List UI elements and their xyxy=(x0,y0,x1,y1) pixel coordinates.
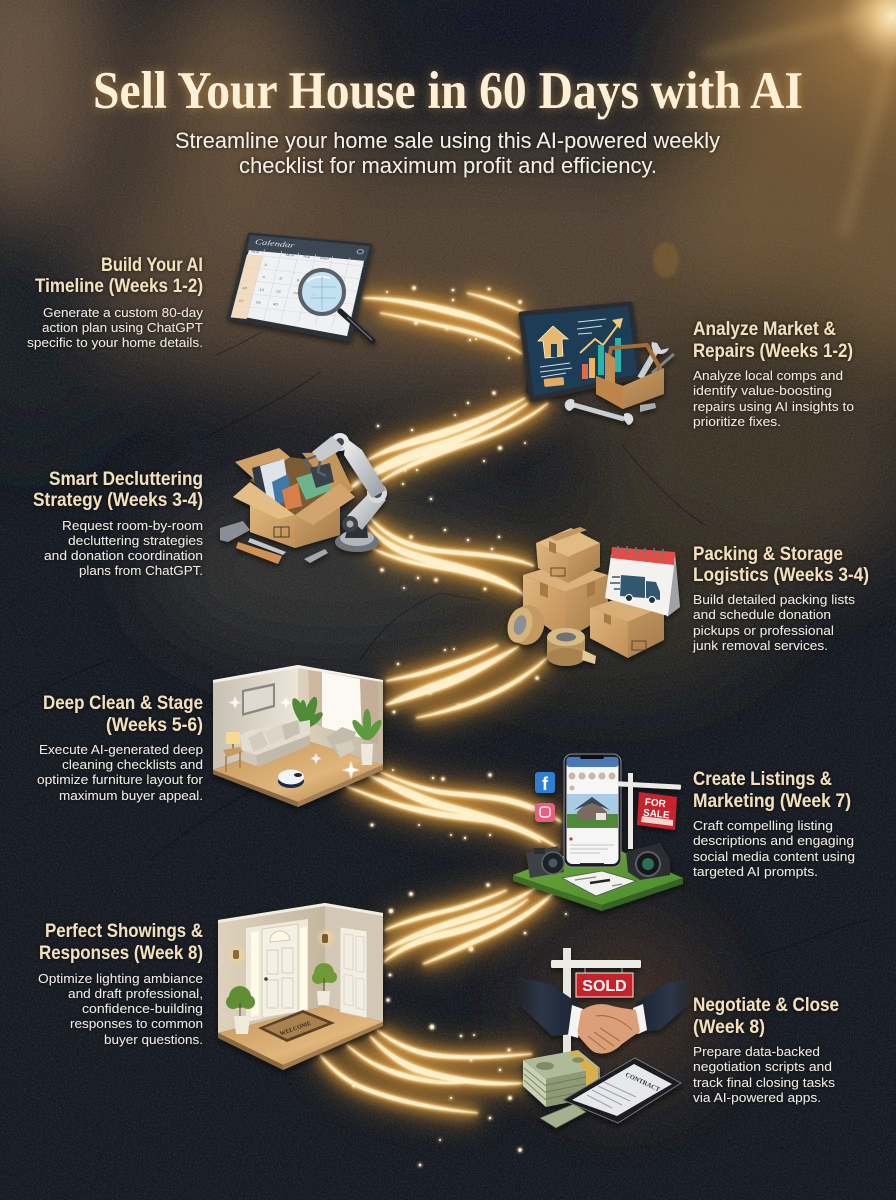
description: buyer questions. xyxy=(104,1032,203,1047)
icon: calendar tablet with magnifier: 17 xyxy=(238,299,244,303)
heading: Deep Clean & Stage xyxy=(43,692,203,714)
heading xyxy=(693,768,851,812)
title: Sell Your House in 60 Days with AI xyxy=(93,62,803,120)
icon: sold sign, handshake, cash and contract: CONTRACT xyxy=(624,1071,661,1094)
heading: Perfect Showings & xyxy=(45,920,203,942)
description: and donation coordination xyxy=(44,548,203,563)
panel: Perfect Showings & Responses xyxy=(38,903,383,1070)
description: prioritize fixes. xyxy=(693,414,781,429)
panel: Build Your AI Timeline xyxy=(27,235,373,350)
description: plans from ChatGPT. xyxy=(79,563,203,578)
description xyxy=(693,368,854,429)
description: Optimize lighting ambiance xyxy=(38,971,203,986)
heading xyxy=(693,543,869,586)
panel: Smart Decluttering Strategy xyxy=(33,433,387,578)
description: Generate a custom 80-day xyxy=(43,305,204,320)
description: action plan using ChatGPT xyxy=(42,320,203,335)
icon: cardboard box with robot arm xyxy=(220,433,387,564)
subtitle: checklist for maximum profit and efficiency. xyxy=(239,153,657,178)
description xyxy=(27,305,204,350)
panel: Analyze Market & Repairs xyxy=(521,304,854,429)
heading xyxy=(33,468,203,511)
icon: calendar tablet with magnifier: 28 xyxy=(311,293,317,297)
icon: calendar tablet with magnifier: 29 xyxy=(255,301,261,305)
heading: Marketing (Week 7) xyxy=(693,790,851,812)
icon: moving boxes, tape and truck calendar xyxy=(504,527,680,666)
description: maximum buyer appeal. xyxy=(59,788,203,803)
icon: calendar tablet with magnifier: Sun xyxy=(251,250,260,254)
description: Request room-by-room xyxy=(62,518,203,533)
description xyxy=(37,742,204,803)
description: targeted AI prompts. xyxy=(693,864,818,879)
icon: calendar tablet with magnifier: 9 xyxy=(296,279,299,282)
icon: calendar tablet with magnifier: 4 xyxy=(262,275,266,279)
heading: (Week 8) xyxy=(693,1016,765,1038)
description: repairs using AI insights to xyxy=(693,399,854,414)
heading: Build Your AI xyxy=(101,254,203,276)
heading xyxy=(43,692,203,736)
description: Analyze local comps and xyxy=(693,368,843,383)
heading: Responses (Week 8) xyxy=(39,942,203,964)
description: optimize furniture layout for xyxy=(37,772,204,787)
icon: calendar tablet with magnifier: 21 xyxy=(276,290,281,293)
description: pickups or professional xyxy=(693,623,834,638)
glowing particles xyxy=(353,286,567,1166)
icon: calendar tablet with magnifier: 13 xyxy=(259,288,264,292)
description: Prepare data-backed xyxy=(693,1044,820,1059)
description: Build detailed packing lists xyxy=(693,592,856,607)
icon: calendar tablet with magnifier: Calendar xyxy=(254,238,296,249)
icon: phone listing with for-sale sign and cameras xyxy=(513,754,683,911)
icon: calendar tablet with magnifier: 30 xyxy=(272,303,278,306)
icon: sold sign, handshake, cash and contract: SOLD xyxy=(582,978,627,995)
description: confidence-building xyxy=(82,1001,203,1016)
heading: Analyze Market & xyxy=(693,318,836,340)
heading xyxy=(39,920,203,964)
description: decluttering strategies xyxy=(68,533,204,548)
description: and draft professional, xyxy=(68,986,203,1001)
description: via AI-powered apps. xyxy=(693,1090,821,1105)
description: responses to common xyxy=(70,1016,203,1031)
icon: calendar tablet with magnifier: Mon xyxy=(285,253,295,257)
description: descriptions and engaging xyxy=(693,833,854,848)
description: social media content using xyxy=(693,849,855,864)
icon: phone listing with for-sale sign and cameras: f xyxy=(542,774,549,794)
description: junk removal services. xyxy=(692,638,828,653)
description: identify value-boosting xyxy=(693,383,832,398)
description xyxy=(693,818,855,879)
heading xyxy=(693,318,853,362)
panel: Packing & Storage Logistics xyxy=(504,527,869,666)
description: negotiation scripts and xyxy=(693,1059,832,1074)
panel: Create Listings & Marketing xyxy=(513,754,855,911)
description: track final closing tasks xyxy=(693,1075,836,1090)
icon: calendar tablet with magnifier: Wed xyxy=(319,257,329,261)
description xyxy=(38,971,203,1047)
heading: Repairs (Weeks 1-2) xyxy=(693,340,853,362)
description xyxy=(44,518,204,578)
description: Craft compelling listing xyxy=(693,818,833,833)
icon: market tablet and toolbox xyxy=(521,304,674,425)
icon: staged entryway with front door: WELCOME xyxy=(279,1021,312,1037)
heading: Strategy (Weeks 3-4) xyxy=(33,489,203,511)
icon: calendar tablet with magnifier: 24 xyxy=(293,291,300,295)
description: specific to your home details. xyxy=(27,335,203,350)
icon: staged living room with robot vacuum xyxy=(213,665,384,807)
icon: calendar tablet with magnifier: 5 xyxy=(279,277,282,280)
description: Execute AI-generated deep xyxy=(39,742,203,757)
heading: Create Listings & xyxy=(693,768,832,790)
icon: staged entryway with front door xyxy=(218,903,383,1070)
heading: (Weeks 5-6) xyxy=(106,714,203,736)
description xyxy=(693,1044,836,1105)
heading: Timeline (Weeks 1-2) xyxy=(35,275,203,297)
icon: calendar tablet with magnifier: Tue xyxy=(302,255,311,259)
panel: Negotiate & Close xyxy=(515,948,839,1128)
panel: Deep Clean & Stage xyxy=(37,665,384,807)
icon: phone listing with for-sale sign and cameras: SALE xyxy=(642,808,670,821)
icon: phone listing with for-sale sign and cameras: FOR xyxy=(644,797,667,810)
icon: calendar tablet with magnifier: 10 xyxy=(242,286,247,290)
heading: Negotiate & Close xyxy=(693,994,839,1016)
heading xyxy=(35,254,203,297)
subtitle xyxy=(175,128,720,178)
description: and schedule donation xyxy=(693,607,831,622)
description: cleaning checklists and xyxy=(62,757,203,772)
subtitle: Streamline your home sale using this AI-powered weekly xyxy=(175,128,720,153)
heading: Smart Decluttering xyxy=(49,468,203,490)
heading xyxy=(693,994,839,1038)
icon: calendar tablet with magnifier xyxy=(230,235,373,341)
heading: Packing & Storage xyxy=(693,543,843,565)
description xyxy=(692,592,856,653)
heading: Logistics (Weeks 3-4) xyxy=(693,564,869,586)
icon: sold sign, handshake, cash and contract xyxy=(515,948,695,1128)
golden swirling path xyxy=(320,293,561,1113)
icon: calendar tablet with magnifier: 3 xyxy=(264,263,267,267)
